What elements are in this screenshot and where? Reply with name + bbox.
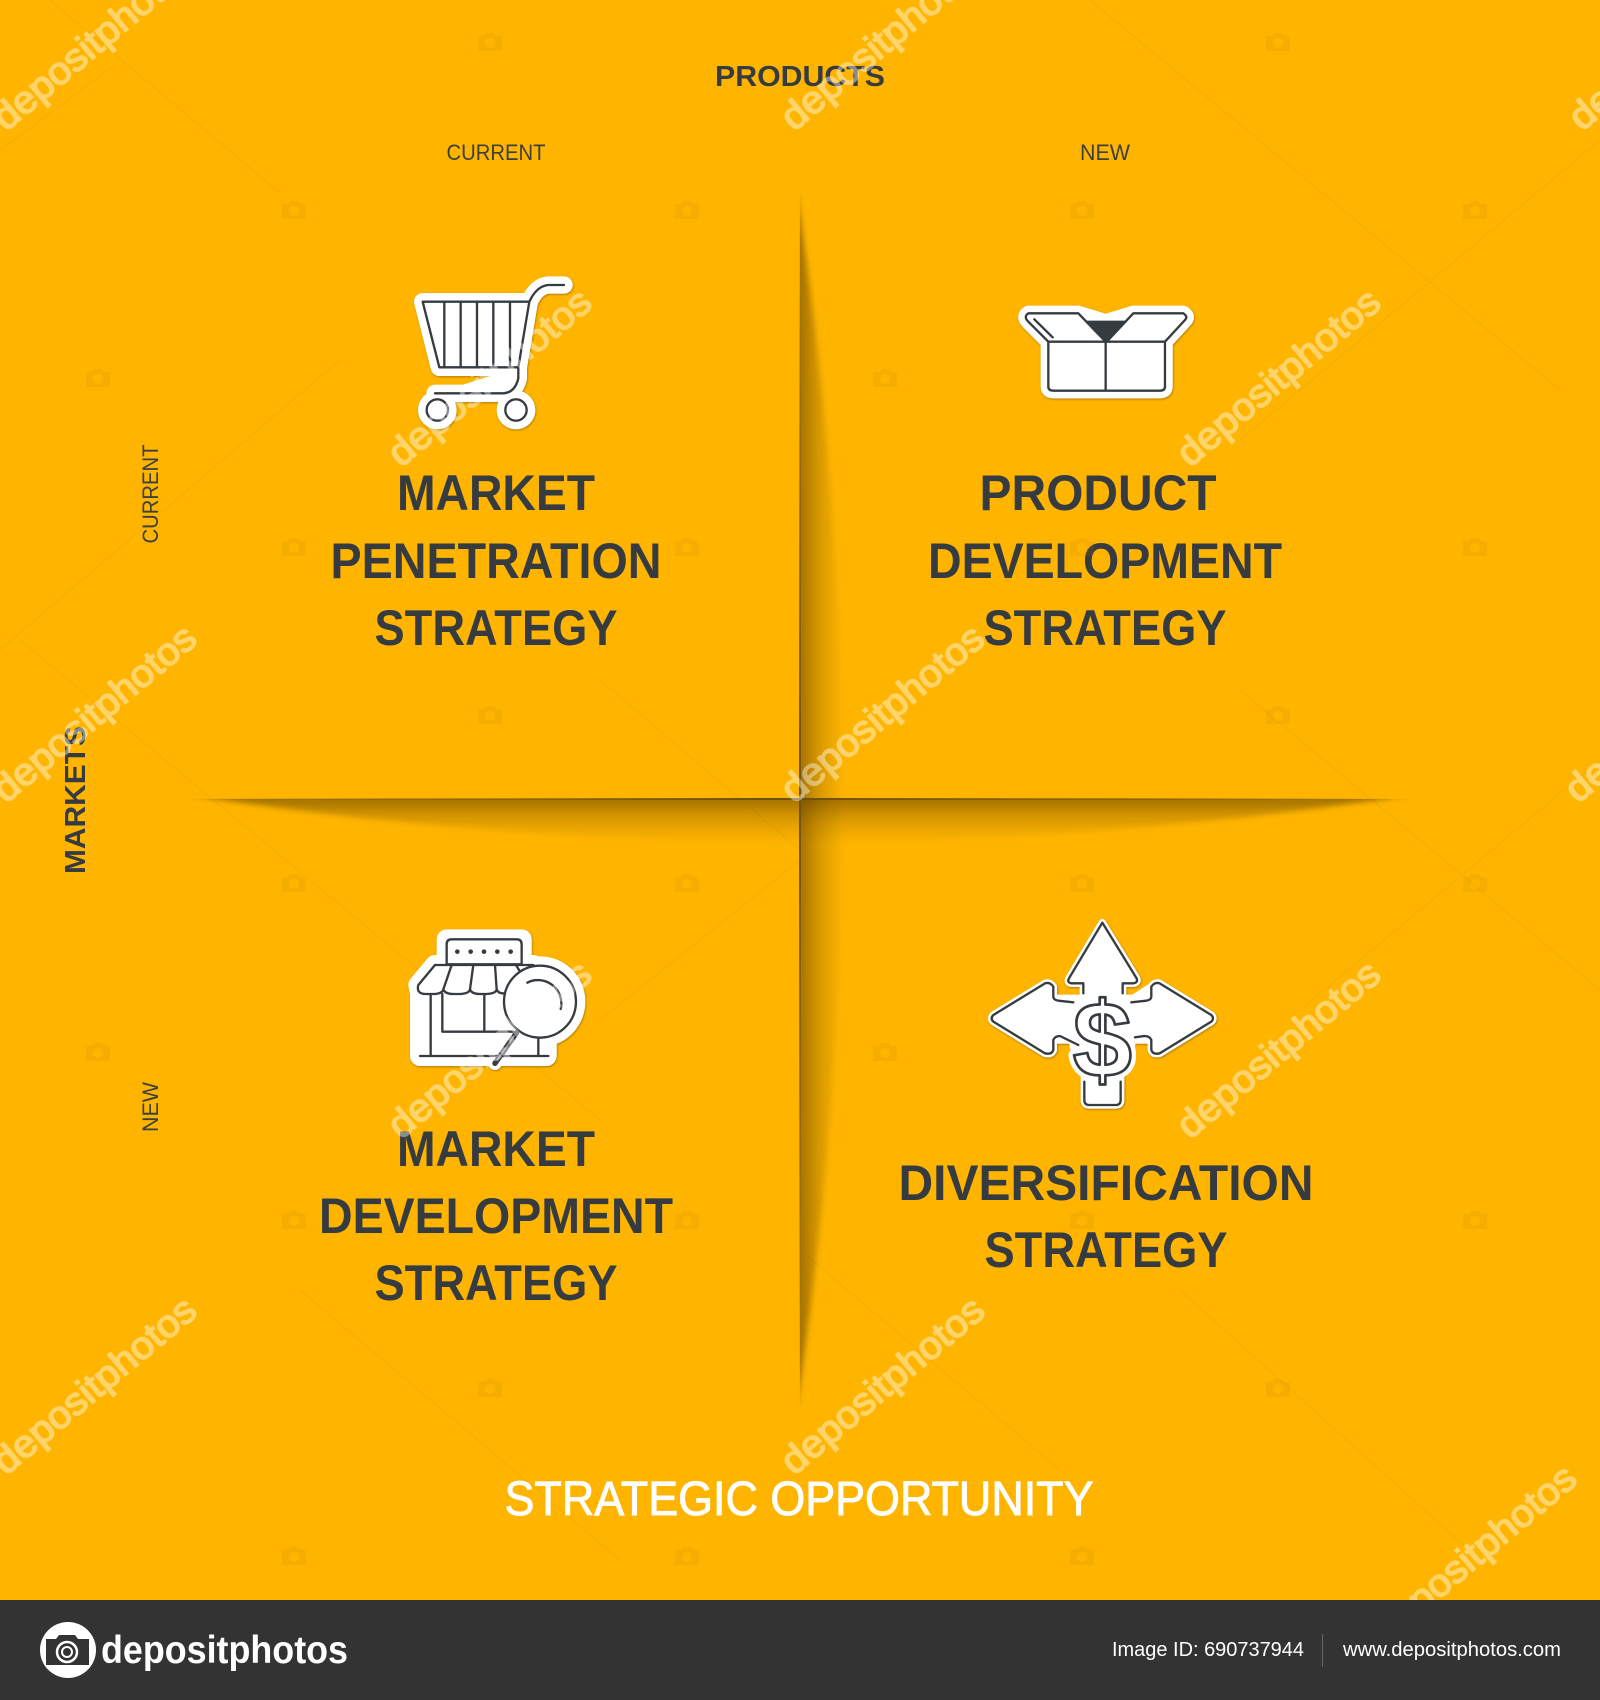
- heading: product development strategy: PRODUCT: [980, 465, 1216, 521]
- heading: diversification strategy: [898, 1155, 1314, 1278]
- watermark: depositphotos text: depositphotos: [1169, 281, 1389, 475]
- footer divider: [1322, 1634, 1323, 1667]
- heading: product development strategy: DEVELOPMENT: [928, 533, 1282, 589]
- website: www.depositphotos.com: [1342, 1639, 1561, 1661]
- vertical divider line: [799, 185, 801, 1414]
- logo: camera badge: [40, 1622, 96, 1678]
- heading: product development strategy: STRATEGY: [984, 600, 1226, 656]
- watermark: depositphotos text: depositphotos: [773, 1289, 993, 1483]
- row label: current: CURRENT: [138, 444, 163, 544]
- quadrant fold shadow: vertical: [800, 197, 838, 1402]
- watermark: depositphotos text: depositphotos: [380, 953, 600, 1147]
- watermark: depositphotos text: depositphotos: [1365, 1457, 1585, 1651]
- axis title: markets: MARKETS: [60, 726, 92, 874]
- logo wordmark: depositphotos: [101, 1629, 348, 1672]
- heading: market penetration strategy: PENETRATION: [330, 533, 662, 589]
- heading: market penetration strategy: [330, 465, 662, 656]
- heading: diversification strategy: STRATEGY: [984, 1222, 1228, 1278]
- icon: four arrows with dollar sign: [992, 923, 1213, 1105]
- heading: market penetration strategy: MARKET: [397, 465, 595, 521]
- icon: storefront with magnifier: [418, 939, 576, 1063]
- heading: diversification strategy: DIVERSIFICATION: [898, 1155, 1314, 1211]
- heading: market development strategy: DEVELOPMENT: [319, 1188, 673, 1244]
- watermark: depositphotos text: depositphotos: [380, 281, 600, 475]
- image id: Image ID: 690737944: [1112, 1639, 1304, 1661]
- axis title: products: PRODUCTS: [715, 61, 885, 93]
- row label: new: NEW: [138, 1082, 163, 1132]
- heading: market development strategy: [319, 1121, 673, 1311]
- bottom bar: [0, 1600, 1600, 1700]
- watermark: depositphotos text: depositphotos: [773, 617, 993, 811]
- heading: market development strategy: STRATEGY: [374, 1255, 618, 1311]
- column label: new: NEW: [1080, 140, 1130, 165]
- heading: market penetration strategy: STRATEGY: [374, 600, 618, 656]
- horizontal divider line: [185, 798, 1414, 800]
- icon: open box: [1026, 313, 1186, 391]
- dollar sign: $: [1073, 980, 1132, 1100]
- heading: product development strategy: [928, 465, 1282, 656]
- footer title: strategic opportunity: STRATEGIC OPPORTUNITY: [504, 1473, 1094, 1526]
- watermark: depositphotos text: depositphotos: [1169, 953, 1389, 1147]
- dollar sign outline: $: [1073, 980, 1132, 1100]
- quadrant fold shadow: horizontal: [197, 799, 1402, 838]
- heading: market development strategy: MARKET: [397, 1121, 595, 1177]
- icon: shopping cart: [423, 285, 564, 421]
- watermark: camera marks: [86, 33, 1487, 1565]
- column label: current: CURRENT: [446, 140, 546, 165]
